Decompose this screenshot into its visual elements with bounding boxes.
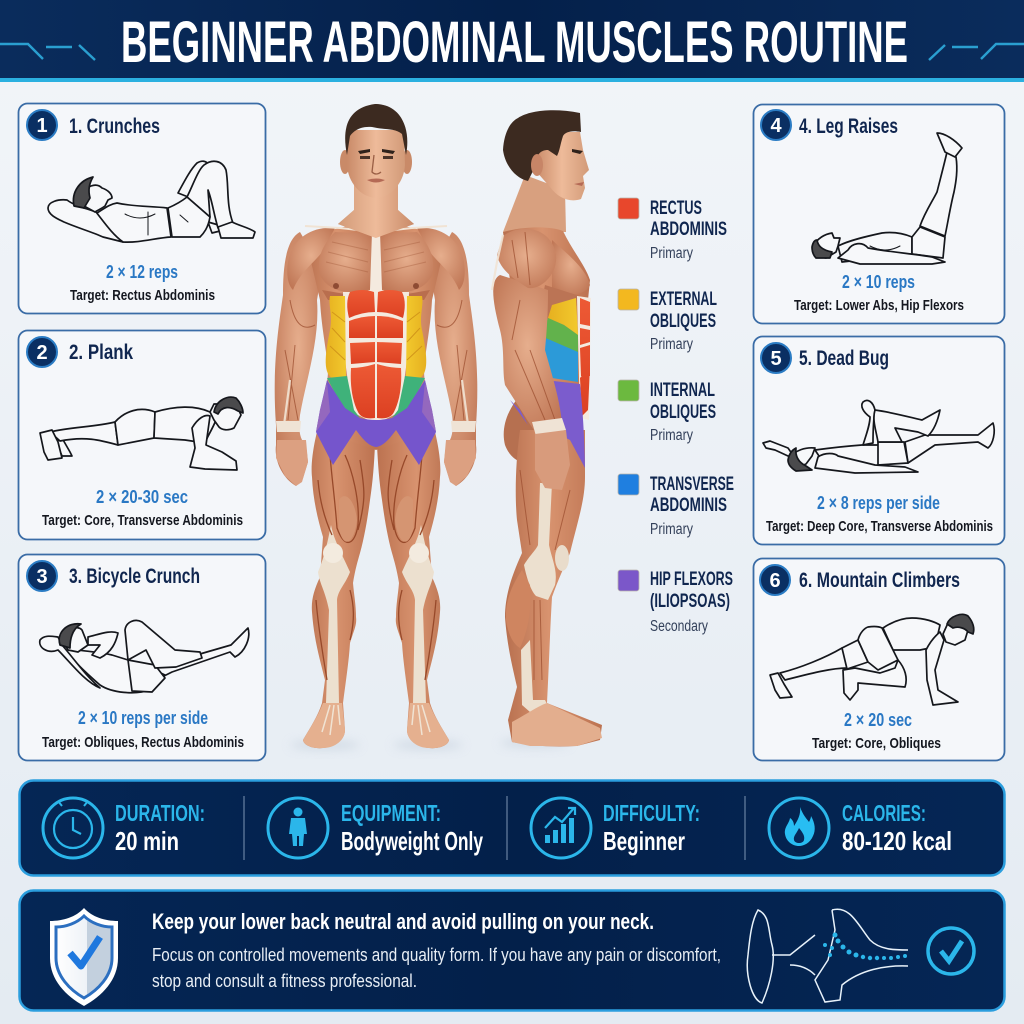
heading: plank: 2. Plank xyxy=(69,341,133,364)
heading: dead bug: 5. Dead Bug xyxy=(799,347,889,370)
number badge 1: 1 xyxy=(36,115,48,137)
heading: leg raises: 4. Leg Raises xyxy=(799,115,898,138)
panel: safety tip xyxy=(20,890,1004,1010)
tip body: Focus on controlled movements and quality form. If you have any pain or discomfort, xyxy=(152,944,721,965)
rectus rows xyxy=(347,290,375,318)
anatomy figure: side view xyxy=(492,110,602,746)
shoulder xyxy=(287,228,335,290)
torso xyxy=(503,227,590,418)
shin tendon xyxy=(521,640,548,712)
leg side xyxy=(505,430,602,746)
legend item rectus abdominis xyxy=(618,198,727,262)
panel: exercise 5 dead bug xyxy=(754,336,1004,544)
thigh lobes xyxy=(316,455,364,680)
reps: 2 × 20-30 sec xyxy=(96,487,188,507)
illustration: leg raises xyxy=(812,133,962,264)
icon: check circle xyxy=(928,928,974,974)
number badge 3: 3 xyxy=(36,566,48,588)
number badge 4 xyxy=(761,110,791,140)
ribs shading xyxy=(322,290,345,300)
equipment xyxy=(341,800,483,856)
reps: 2 × 20 sec xyxy=(844,710,912,730)
panel: exercise 2 plank xyxy=(18,330,266,540)
illustration: crunch xyxy=(48,161,255,242)
tip body xyxy=(152,944,721,991)
duration: 20 min xyxy=(115,826,179,856)
tip body: stop and consult a fitness professional. xyxy=(152,970,417,991)
difficulty: Beginner xyxy=(603,826,685,856)
illustration: mountain climbers xyxy=(770,614,974,705)
torso xyxy=(305,212,376,450)
thigh tendon xyxy=(524,483,556,600)
target: Target: Lower Abs, Hip Flexors xyxy=(794,297,964,314)
hip flexor side xyxy=(510,380,585,468)
panel: exercise 1 crunches xyxy=(18,104,266,314)
legend item external obliques xyxy=(618,289,717,353)
panel: exercise 4 leg raises xyxy=(754,104,1004,324)
heading: mountain climbers: 6. Mountain Climbers xyxy=(799,569,960,592)
leg xyxy=(303,405,375,748)
number badge 6 xyxy=(760,565,790,595)
number badge 1 xyxy=(27,110,57,140)
legend item transverse abdominis: Primary xyxy=(650,521,693,538)
side hand xyxy=(535,430,570,490)
panel: stats bar xyxy=(20,780,1004,876)
foot xyxy=(303,703,345,748)
target: Target: Obliques, Rectus Abdominis xyxy=(42,734,244,751)
rib area xyxy=(540,285,580,322)
leg cream tendon xyxy=(318,525,350,703)
header banner xyxy=(0,0,1024,82)
side arm xyxy=(493,275,562,432)
neck xyxy=(503,175,566,232)
legend item transverse abdominis xyxy=(618,474,734,538)
tip heading: Keep your lower back neutral and avoid pulling on your neck. xyxy=(152,909,654,934)
number badge 6: 6 xyxy=(769,570,781,592)
calories: 80-120 kcal xyxy=(842,826,952,856)
external oblique side xyxy=(548,298,578,335)
cream abdominal sheath xyxy=(343,292,376,424)
icon: shield xyxy=(50,908,118,1006)
external oblique yellow xyxy=(326,296,346,378)
reps: 2 × 8 reps per side xyxy=(817,493,940,513)
icon: flame xyxy=(769,798,829,858)
difficulty: DIFFICULTY: xyxy=(603,800,700,826)
reps: 2 × 12 reps xyxy=(106,262,178,282)
deltoid xyxy=(497,229,556,288)
duration xyxy=(115,800,205,856)
neck xyxy=(338,180,414,238)
number badge 4: 4 xyxy=(770,115,782,137)
legend item rectus abdominis: Primary xyxy=(650,245,693,262)
right half mirrored xyxy=(338,180,477,748)
icon: stopwatch xyxy=(43,798,103,858)
target: Target: Rectus Abdominis xyxy=(70,287,215,304)
number badge 5: 5 xyxy=(770,348,782,370)
calf xyxy=(506,570,531,648)
glute xyxy=(504,390,543,462)
sternum tendon xyxy=(360,230,376,296)
legend item external obliques: OBLIQUES xyxy=(650,311,716,332)
icon: spine dots xyxy=(823,932,907,960)
transverse side xyxy=(538,336,578,382)
illustration: plank xyxy=(40,397,243,470)
legend item internal obliques: INTERNAL xyxy=(650,380,715,401)
internal oblique side xyxy=(540,318,578,356)
legend item rectus abdominis: RECTUS xyxy=(650,198,702,219)
reps: 2 × 10 reps per side xyxy=(78,708,208,728)
chest xyxy=(552,240,590,295)
duration: DURATION: xyxy=(115,800,205,826)
arm xyxy=(275,232,322,486)
calories xyxy=(842,800,952,856)
foot xyxy=(512,703,602,746)
wrist xyxy=(532,418,566,436)
pectoral xyxy=(319,232,372,292)
legend item external obliques: Primary xyxy=(650,336,693,353)
legend item hip flexors xyxy=(618,569,733,635)
target: Target: Core, Obliques xyxy=(812,735,941,752)
panel: exercise 3 bicycle crunch xyxy=(18,554,266,760)
rectus side strip xyxy=(577,296,591,420)
icon: person xyxy=(268,798,328,858)
panel: exercise 6 mountain climbers xyxy=(754,558,1004,760)
side head xyxy=(503,110,589,200)
header right tech accent xyxy=(929,44,1024,60)
difficulty xyxy=(603,800,700,856)
icon: rising bars xyxy=(531,798,591,858)
equipment: Bodyweight Only xyxy=(341,826,483,856)
legend item internal obliques xyxy=(618,380,716,444)
legend item transverse abdominis: ABDOMINIS xyxy=(650,495,727,516)
legend item hip flexors: HIP FLEXORS xyxy=(650,569,733,590)
internal oblique green xyxy=(327,376,360,418)
number badge 5 xyxy=(761,343,791,373)
legend: muscle groups xyxy=(618,198,734,635)
legend item transverse abdominis: TRANSVERSE xyxy=(650,474,734,495)
legend item internal obliques: Primary xyxy=(650,427,693,444)
target: Target: Core, Transverse Abdominis xyxy=(42,512,243,529)
legend item internal obliques: OBLIQUES xyxy=(650,402,716,423)
number badge 2 xyxy=(27,337,57,367)
icon: spine outline xyxy=(747,909,908,1003)
legend item hip flexors: (ILIOPSOAS) xyxy=(650,591,730,612)
equipment: EQUIPMENT: xyxy=(341,800,441,826)
illustration: bicycle crunch xyxy=(40,620,249,693)
floor shadows xyxy=(290,739,570,749)
left half of body xyxy=(275,180,414,748)
reps: 2 × 10 reps xyxy=(842,272,915,292)
number badge 2: 2 xyxy=(36,342,48,364)
illustration: dead bug xyxy=(763,400,994,473)
legend item hip flexors: Secondary xyxy=(650,618,708,635)
legend item rectus abdominis: ABDOMINIS xyxy=(650,219,727,240)
head xyxy=(340,104,412,198)
calories: CALORIES: xyxy=(842,800,926,826)
legend item external obliques: EXTERNAL xyxy=(650,289,717,310)
anatomy figure: front view xyxy=(275,104,477,748)
number badge 3 xyxy=(27,561,57,591)
heading: crunches: 1. Crunches xyxy=(69,115,160,138)
heading: bicycle crunch: 3. Bicycle Crunch xyxy=(69,565,200,588)
hip flexor purple xyxy=(316,380,376,465)
hand xyxy=(276,440,308,486)
header left tech accent xyxy=(0,44,95,60)
